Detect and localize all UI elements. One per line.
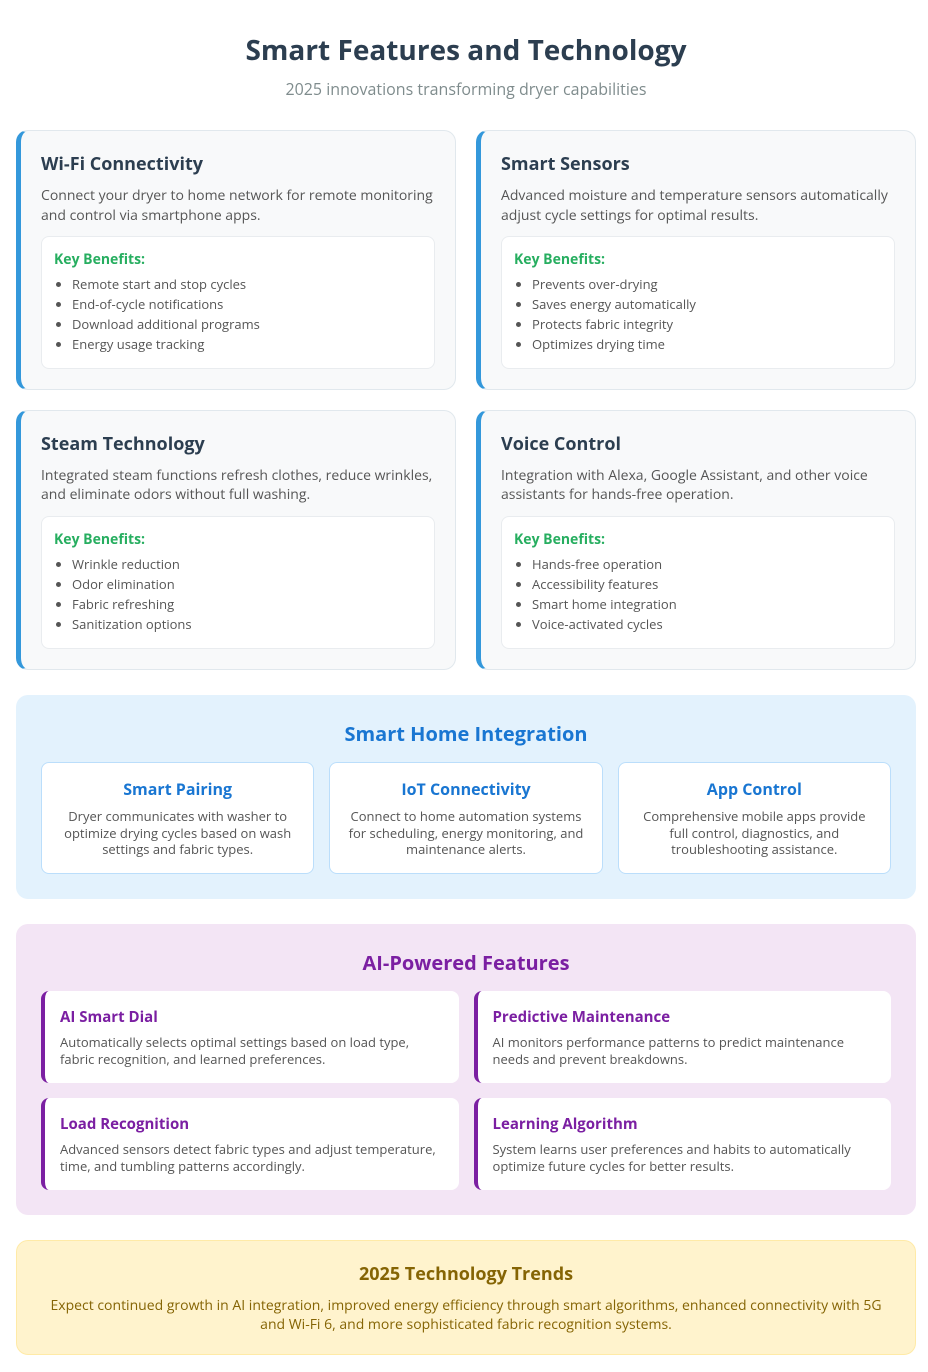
benefits: Smart Sensors: Saves energy automatically [532, 295, 696, 313]
card: Load Recognition: Advanced sensors detect fabric types and adjust temperature, [60, 1140, 436, 1158]
benefits: Steam Technology: Wrinkle reduction [72, 555, 180, 573]
panel: Smart Sensors: adjust cycle settings for optimal results. [501, 206, 758, 224]
panel: Smart Sensors: Advanced moisture and temperature sensors automatically [501, 186, 888, 205]
benefits: Wi-Fi Connectivity: Download additional programs [72, 315, 260, 333]
benefits: Wi-Fi Connectivity: End-of-cycle notifications [72, 295, 223, 313]
card: Predictive Maintenance: needs and prevent breakdowns. [492, 1050, 688, 1068]
panel: Wi-Fi Connectivity: Wi-Fi Connectivity [41, 152, 203, 176]
panel: Wi-Fi Connectivity: and control via smartphone apps. [41, 206, 261, 224]
card: Smart Pairing: settings and fabric types. [102, 840, 253, 858]
panel: Voice Control: Voice Control [501, 432, 621, 456]
card: App Control: full control, diagnostics, and [669, 824, 839, 842]
card: IoT Connectivity: Connect to home automation systems [351, 807, 581, 825]
heading: Smart Home Integration: Smart Home Integration [344, 720, 588, 747]
benefits: Steam Technology: Key Benefits: [54, 530, 145, 549]
panel: Steam Technology: Integrated steam functions refresh clothes, reduce wrinkles, [41, 466, 432, 485]
benefits: Smart Sensors: Protects fabric integrity [532, 315, 673, 333]
card: IoT Connectivity: IoT Connectivity [401, 778, 531, 800]
panel: Steam Technology: and eliminate odors without full washing. [41, 485, 310, 504]
panel: Smart Home Integration background [16, 695, 916, 899]
benefits: Steam Technology: Fabric refreshing [72, 595, 174, 613]
card: Predictive Maintenance [474, 991, 891, 1083]
subtitle: 2025 innovations transforming dryer capabilities [285, 78, 647, 100]
benefits: Steam Technology: Odor elimination [72, 575, 175, 593]
benefits: Steam Technology [41, 516, 435, 649]
card: Smart Pairing: Smart Pairing [123, 778, 232, 800]
card: Smart Pairing: Dryer communicates with washer to [68, 807, 287, 825]
text: trends description: and Wi-Fi 6, and more sophisticated fabric recognition systems. [260, 1315, 672, 1334]
card: App Control: Comprehensive mobile apps provide [643, 807, 866, 825]
benefits: Voice Control: Hands-free operation [532, 555, 662, 573]
card: Learning Algorithm: optimize future cycles for better results. [492, 1157, 734, 1175]
text: trends description [50, 1296, 882, 1334]
card: IoT Connectivity: for scheduling, energy monitoring, and [349, 824, 583, 842]
card: Load Recognition: Load Recognition [60, 1114, 189, 1134]
title: Smart Features and Technology [245, 31, 687, 69]
card: AI Smart Dial: AI Smart Dial [60, 1007, 158, 1027]
benefits: Voice Control: Accessibility features [532, 575, 658, 593]
card: Load Recognition [41, 1098, 458, 1190]
card: Load Recognition: time, and tumbling patterns accordingly. [60, 1157, 305, 1175]
text: trends description: Expect continued growth in AI integration, improved energy efficiency through smart algorithms, enhanced connectivity with 5G [50, 1296, 882, 1315]
benefits: Smart Sensors [501, 236, 895, 369]
card: Smart Pairing [41, 762, 314, 874]
benefits: Voice Control: Voice-activated cycles [532, 615, 663, 633]
benefits: Wi-Fi Connectivity: Energy usage tracking [72, 335, 204, 353]
panel: Voice Control [476, 410, 916, 670]
card: AI Smart Dial: Automatically selects optimal settings based on load type, [60, 1033, 409, 1051]
card: App Control: troubleshooting assistance. [671, 840, 837, 858]
benefits: Voice Control: Smart home integration [532, 595, 677, 613]
card: Learning Algorithm: Learning Algorithm [492, 1114, 638, 1134]
heading: AI-Powered Features: AI-Powered Features [362, 949, 570, 976]
card: Predictive Maintenance: Predictive Maintenance [492, 1007, 670, 1027]
benefits: Smart Sensors: Key Benefits: [514, 250, 605, 269]
card: Learning Algorithm: System learns user preferences and habits to automatically [492, 1140, 851, 1158]
benefits: Wi-Fi Connectivity: Key Benefits: [54, 250, 145, 269]
heading: 2025 Technology Trends: 2025 Technology Trends [359, 1262, 573, 1286]
card: Learning Algorithm [474, 1098, 891, 1190]
benefits: Wi-Fi Connectivity [41, 236, 435, 369]
benefits: Smart Sensors: Prevents over-drying [532, 275, 658, 293]
benefits: Voice Control: Key Benefits: [514, 530, 605, 549]
panel: Wi-Fi Connectivity: Connect your dryer to home network for remote monitoring [41, 186, 433, 205]
panel: Steam Technology [16, 410, 456, 670]
panel: Smart Sensors [476, 130, 916, 390]
card: IoT Connectivity [329, 762, 603, 874]
card: App Control: App Control [707, 778, 802, 800]
card: IoT Connectivity: maintenance alerts. [406, 840, 526, 858]
panel: AI-Powered Features background [16, 924, 916, 1215]
benefits: Steam Technology: Sanitization options [72, 615, 192, 633]
card: Smart Pairing: optimize drying cycles based on wash [64, 824, 291, 842]
panel: Voice Control: Integration with Alexa, Google Assistant, and other voice [501, 466, 868, 485]
panel: 2025 Technology Trends [16, 1240, 916, 1355]
panel: Wi-Fi Connectivity [16, 130, 456, 390]
panel: Voice Control: assistants for hands-free operation. [501, 485, 734, 504]
card: AI Smart Dial: fabric recognition, and learned preferences. [60, 1050, 325, 1068]
card: AI Smart Dial [41, 991, 458, 1083]
benefits: Voice Control [501, 516, 895, 649]
benefits: Smart Sensors: Optimizes drying time [532, 335, 665, 353]
benefits: Wi-Fi Connectivity: Remote start and stop cycles [72, 275, 246, 293]
card: App Control [618, 762, 891, 874]
panel: Smart Sensors: Smart Sensors [501, 152, 630, 176]
panel: Steam Technology: Steam Technology [41, 432, 205, 456]
card: Predictive Maintenance: AI monitors performance patterns to predict maintenance [492, 1033, 844, 1051]
